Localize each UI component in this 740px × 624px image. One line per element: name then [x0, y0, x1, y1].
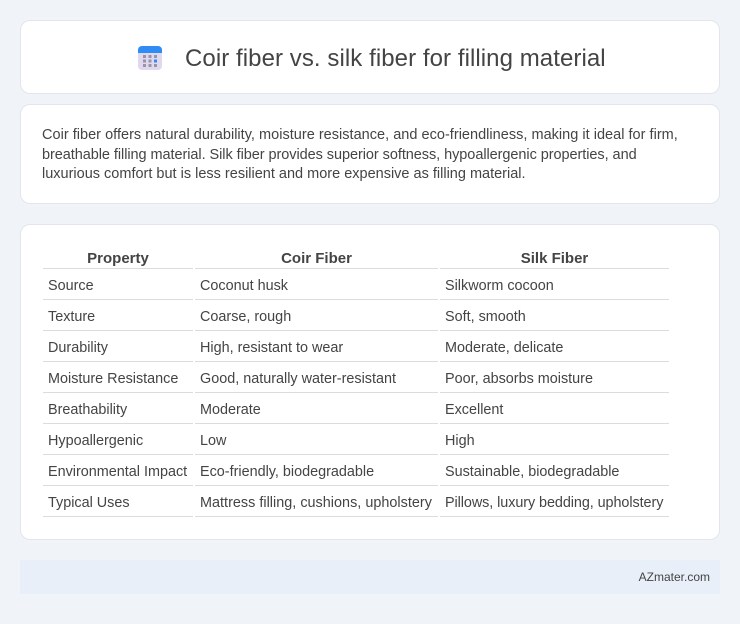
- table header: Silk Fiber: [521, 250, 588, 267]
- row: hypoallergenic: [48, 433, 475, 449]
- row: hypoallergenic: Low: [200, 433, 226, 449]
- row: texture: [48, 309, 526, 325]
- comparison table panel: [20, 224, 720, 540]
- row: environmental impact: Sustainable, biodegradable: [445, 464, 619, 480]
- row: typical uses: Typical Uses: [48, 495, 130, 511]
- row: durability: Moderate, delicate: [445, 340, 563, 356]
- row: moisture resistance: Moisture Resistance: [48, 371, 178, 387]
- row: hypoallergenic: High: [445, 433, 475, 449]
- row: moisture resistance: [48, 371, 593, 387]
- icon: calendar: [138, 46, 162, 70]
- title card: [20, 20, 720, 94]
- intro text panel: [20, 104, 720, 204]
- row: breathability: [48, 402, 504, 418]
- table header: Coir Fiber: [281, 250, 352, 267]
- row: hypoallergenic: Hypoallergenic: [48, 433, 143, 449]
- row: breathability: Breathability: [48, 402, 127, 418]
- row: moisture resistance: Good, naturally water-resistant: [200, 371, 396, 387]
- row: source: Source: [48, 278, 94, 294]
- row: environmental impact: [48, 464, 619, 480]
- intro paragraph: [42, 127, 678, 182]
- table header: [87, 250, 588, 267]
- row: texture: Texture: [48, 309, 95, 325]
- row: texture: Soft, smooth: [445, 309, 526, 325]
- footer bar: [20, 560, 720, 594]
- row: source: Silkworm cocoon: [445, 278, 554, 294]
- row: source: [48, 278, 554, 294]
- row: durability: High, resistant to wear: [200, 340, 343, 356]
- row: environmental impact: Eco-friendly, biodegradable: [200, 464, 374, 480]
- row: breathability: Moderate: [200, 402, 261, 418]
- intro paragraph: breathable filling material. Silk fiber provides superior softness, hypoallergenic properties, and: [42, 146, 637, 162]
- row: typical uses: [48, 495, 664, 511]
- row: texture: Coarse, rough: [200, 309, 291, 325]
- title: Coir fiber vs. silk fiber for filling material: [185, 45, 606, 72]
- row: source: Coconut husk: [200, 278, 288, 294]
- row: typical uses: Pillows, luxury bedding, upholstery: [445, 495, 663, 511]
- row: breathability: Excellent: [445, 402, 503, 418]
- table header: Property: [87, 250, 149, 267]
- row: durability: Durability: [48, 340, 108, 356]
- intro paragraph: Coir fiber offers natural durability, moisture resistance, and eco-friendliness, making it ideal for firm,: [42, 127, 678, 143]
- row: durability: [48, 340, 563, 356]
- row: moisture resistance: Poor, absorbs moisture: [445, 371, 593, 387]
- row: environmental impact: Environmental Impact: [48, 464, 187, 480]
- row: typical uses: Mattress filling, cushions, upholstery: [200, 495, 432, 511]
- intro paragraph: luxurious comfort but is less resilient and more expensive as filling material.: [42, 166, 526, 182]
- footer credit: AZmater.com: [639, 570, 710, 584]
